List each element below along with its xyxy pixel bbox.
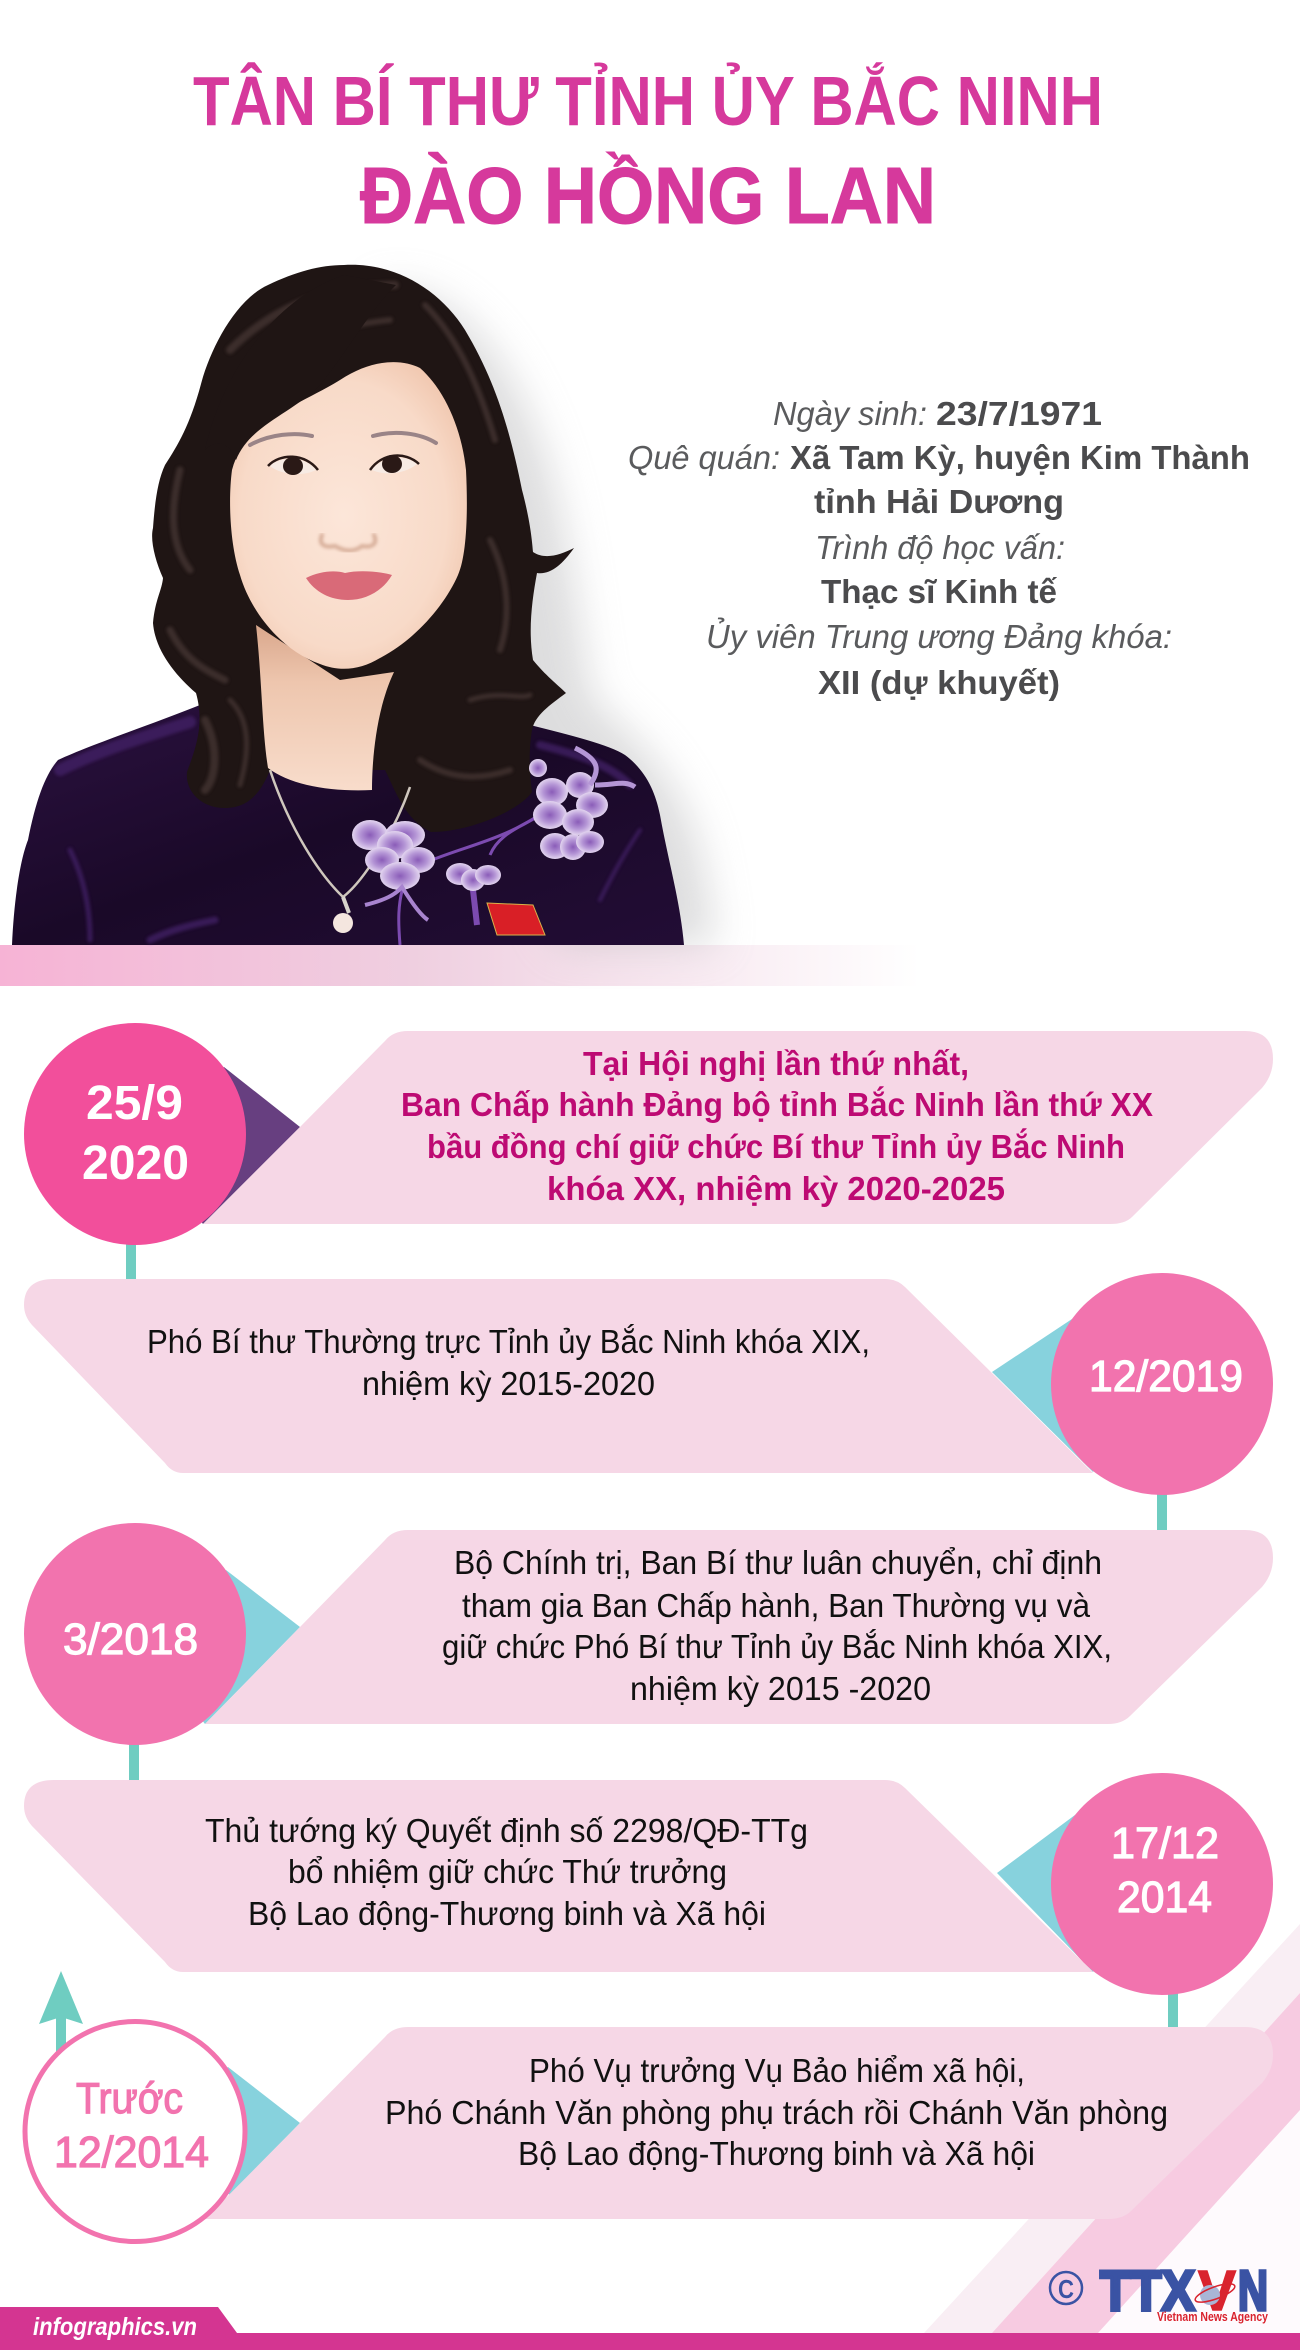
banner 1: khóa XX, nhiệm kỳ 2020-2025 bbox=[547, 1170, 1005, 1207]
date circle Truoc 12/2014: Trước bbox=[76, 2074, 183, 2123]
copyright mark: C bbox=[1058, 2274, 1074, 2304]
banner 5: Bộ Lao động-Thương binh và Xã hội bbox=[518, 2135, 1035, 2172]
eyebrows bbox=[250, 434, 312, 445]
date circle Truoc 12/2014: 12/2014 bbox=[54, 2128, 209, 2177]
date circle 12/2019: 12/2019 bbox=[1089, 1352, 1243, 1401]
arrow up bbox=[39, 1971, 83, 2055]
banner 1: bầu đồng chí giữ chức Bí thư Tỉnh ủy Bắc Ninh bbox=[427, 1128, 1125, 1165]
pink strip under portrait bbox=[0, 945, 920, 986]
triangle 4 bbox=[997, 1812, 1165, 1972]
info block: XII (dự khuyết) bbox=[818, 664, 1060, 701]
info block: Thạc sĩ Kinh tế bbox=[821, 573, 1058, 610]
date circle 3/2018: 3/2018 bbox=[63, 1615, 198, 1664]
info block bbox=[628, 395, 1250, 701]
info block: Quê quán: bbox=[628, 439, 780, 476]
triangle 1 bbox=[135, 1067, 300, 1224]
lips bbox=[306, 571, 392, 600]
date circle 17/12 2014: 2014 bbox=[1117, 1873, 1212, 1922]
logo TTXVN bbox=[1050, 2259, 1269, 2324]
title: ĐÀO HỒNG LAN bbox=[360, 151, 936, 240]
banner 1: Tại Hội nghị lần thứ nhất, bbox=[583, 1045, 969, 1082]
footer bar: infographics.vn bbox=[33, 2313, 197, 2341]
info block: tỉnh Hải Dương bbox=[814, 483, 1064, 520]
info block: Ủy viên Trung ương Đảng khóa: bbox=[706, 617, 1172, 655]
stem 3 bbox=[129, 1740, 139, 1782]
info block: Xã Tam Kỳ, huyện Kim Thành bbox=[790, 439, 1250, 476]
face bbox=[230, 362, 467, 669]
title: TÂN BÍ THƯ TỈNH ỦY BẮC NINH bbox=[193, 61, 1103, 140]
eyes bbox=[270, 459, 316, 474]
neck bbox=[256, 625, 394, 790]
banner 1: Ban Chấp hành Đảng bộ tỉnh Bắc Ninh lần thứ XX bbox=[401, 1086, 1153, 1123]
stem 4 bbox=[1168, 1990, 1178, 2029]
banner 3: Bộ Chính trị, Ban Bí thư luân chuyển, chỉ định bbox=[454, 1544, 1102, 1581]
triangle 2 bbox=[992, 1317, 1165, 1472]
hair bbox=[152, 265, 574, 832]
triangle 3 bbox=[135, 1570, 300, 1724]
date circle 25/9 2020: 2020 bbox=[82, 1137, 189, 1190]
title bbox=[193, 61, 1103, 240]
banner 3 bbox=[205, 1530, 1273, 1724]
footer bar bbox=[0, 2307, 1300, 2350]
banner 4: Thủ tướng ký Quyết định số 2298/QĐ-TTg bbox=[205, 1812, 808, 1849]
background diagonal stripes bbox=[924, 1924, 1300, 2333]
banner 4: bổ nhiệm giữ chức Thứ trưởng bbox=[288, 1853, 727, 1890]
date circle 25/9 2020: 25/9 bbox=[86, 1077, 183, 1130]
banner 1 bbox=[203, 1031, 1273, 1224]
banner 2: Phó Bí thư Thường trực Tỉnh ủy Bắc Ninh khóa XIX, bbox=[147, 1323, 870, 1360]
timeline bbox=[24, 1023, 1273, 2242]
necklace bbox=[270, 770, 410, 897]
copyright mark bbox=[1050, 2272, 1082, 2304]
embroidered flowers bbox=[352, 748, 635, 945]
stem 2 bbox=[1157, 1490, 1167, 1532]
logo TTXVN: N bbox=[1238, 2259, 1268, 2323]
banner 3: nhiệm kỳ 2015 -2020 bbox=[630, 1670, 931, 1707]
logo TTXVN: TTX bbox=[1100, 2259, 1195, 2323]
banner 2: nhiệm kỳ 2015-2020 bbox=[362, 1365, 655, 1402]
portrait bbox=[12, 265, 716, 945]
date circle 17/12 2014: 17/12 bbox=[1111, 1819, 1219, 1868]
date circle 12/2019 bbox=[1051, 1273, 1273, 1495]
date circle 17/12 2014 bbox=[1051, 1773, 1273, 1995]
flag pin bbox=[487, 903, 545, 935]
triangle 5 bbox=[135, 2067, 300, 2195]
logo TTXVN: V bbox=[1198, 2259, 1236, 2323]
fringe bbox=[205, 275, 396, 460]
date circle 3/2018 bbox=[24, 1523, 246, 1745]
banner 3: giữ chức Phó Bí thư Tỉnh ủy Bắc Ninh khóa XIX, bbox=[442, 1628, 1112, 1665]
banner 5: Phó Chánh Văn phòng phụ trách rồi Chánh Văn phòng bbox=[385, 2094, 1168, 2131]
banner 4 bbox=[24, 1780, 1093, 1972]
stem 1 bbox=[126, 1240, 136, 1282]
info block: Ngày sinh: bbox=[773, 395, 927, 432]
banner 3: tham gia Ban Chấp hành, Ban Thường vụ và bbox=[462, 1587, 1091, 1624]
banner 5 bbox=[205, 2027, 1273, 2219]
banner 5: Phó Vụ trưởng Vụ Bảo hiểm xã hội, bbox=[529, 2052, 1025, 2089]
logo TTXVN: Vietnam News Agency bbox=[1157, 2309, 1269, 2324]
date circle Truoc 12/2014 bbox=[25, 2022, 245, 2242]
date circle 25/9 2020 bbox=[24, 1023, 246, 1245]
info block: Trình độ học vấn: bbox=[815, 529, 1065, 566]
dress bbox=[12, 705, 684, 945]
banner 4: Bộ Lao động-Thương binh và Xã hội bbox=[248, 1895, 766, 1932]
info block: 23/7/1971 bbox=[936, 395, 1102, 432]
nose bbox=[321, 535, 375, 550]
banner 2 bbox=[24, 1279, 1093, 1473]
